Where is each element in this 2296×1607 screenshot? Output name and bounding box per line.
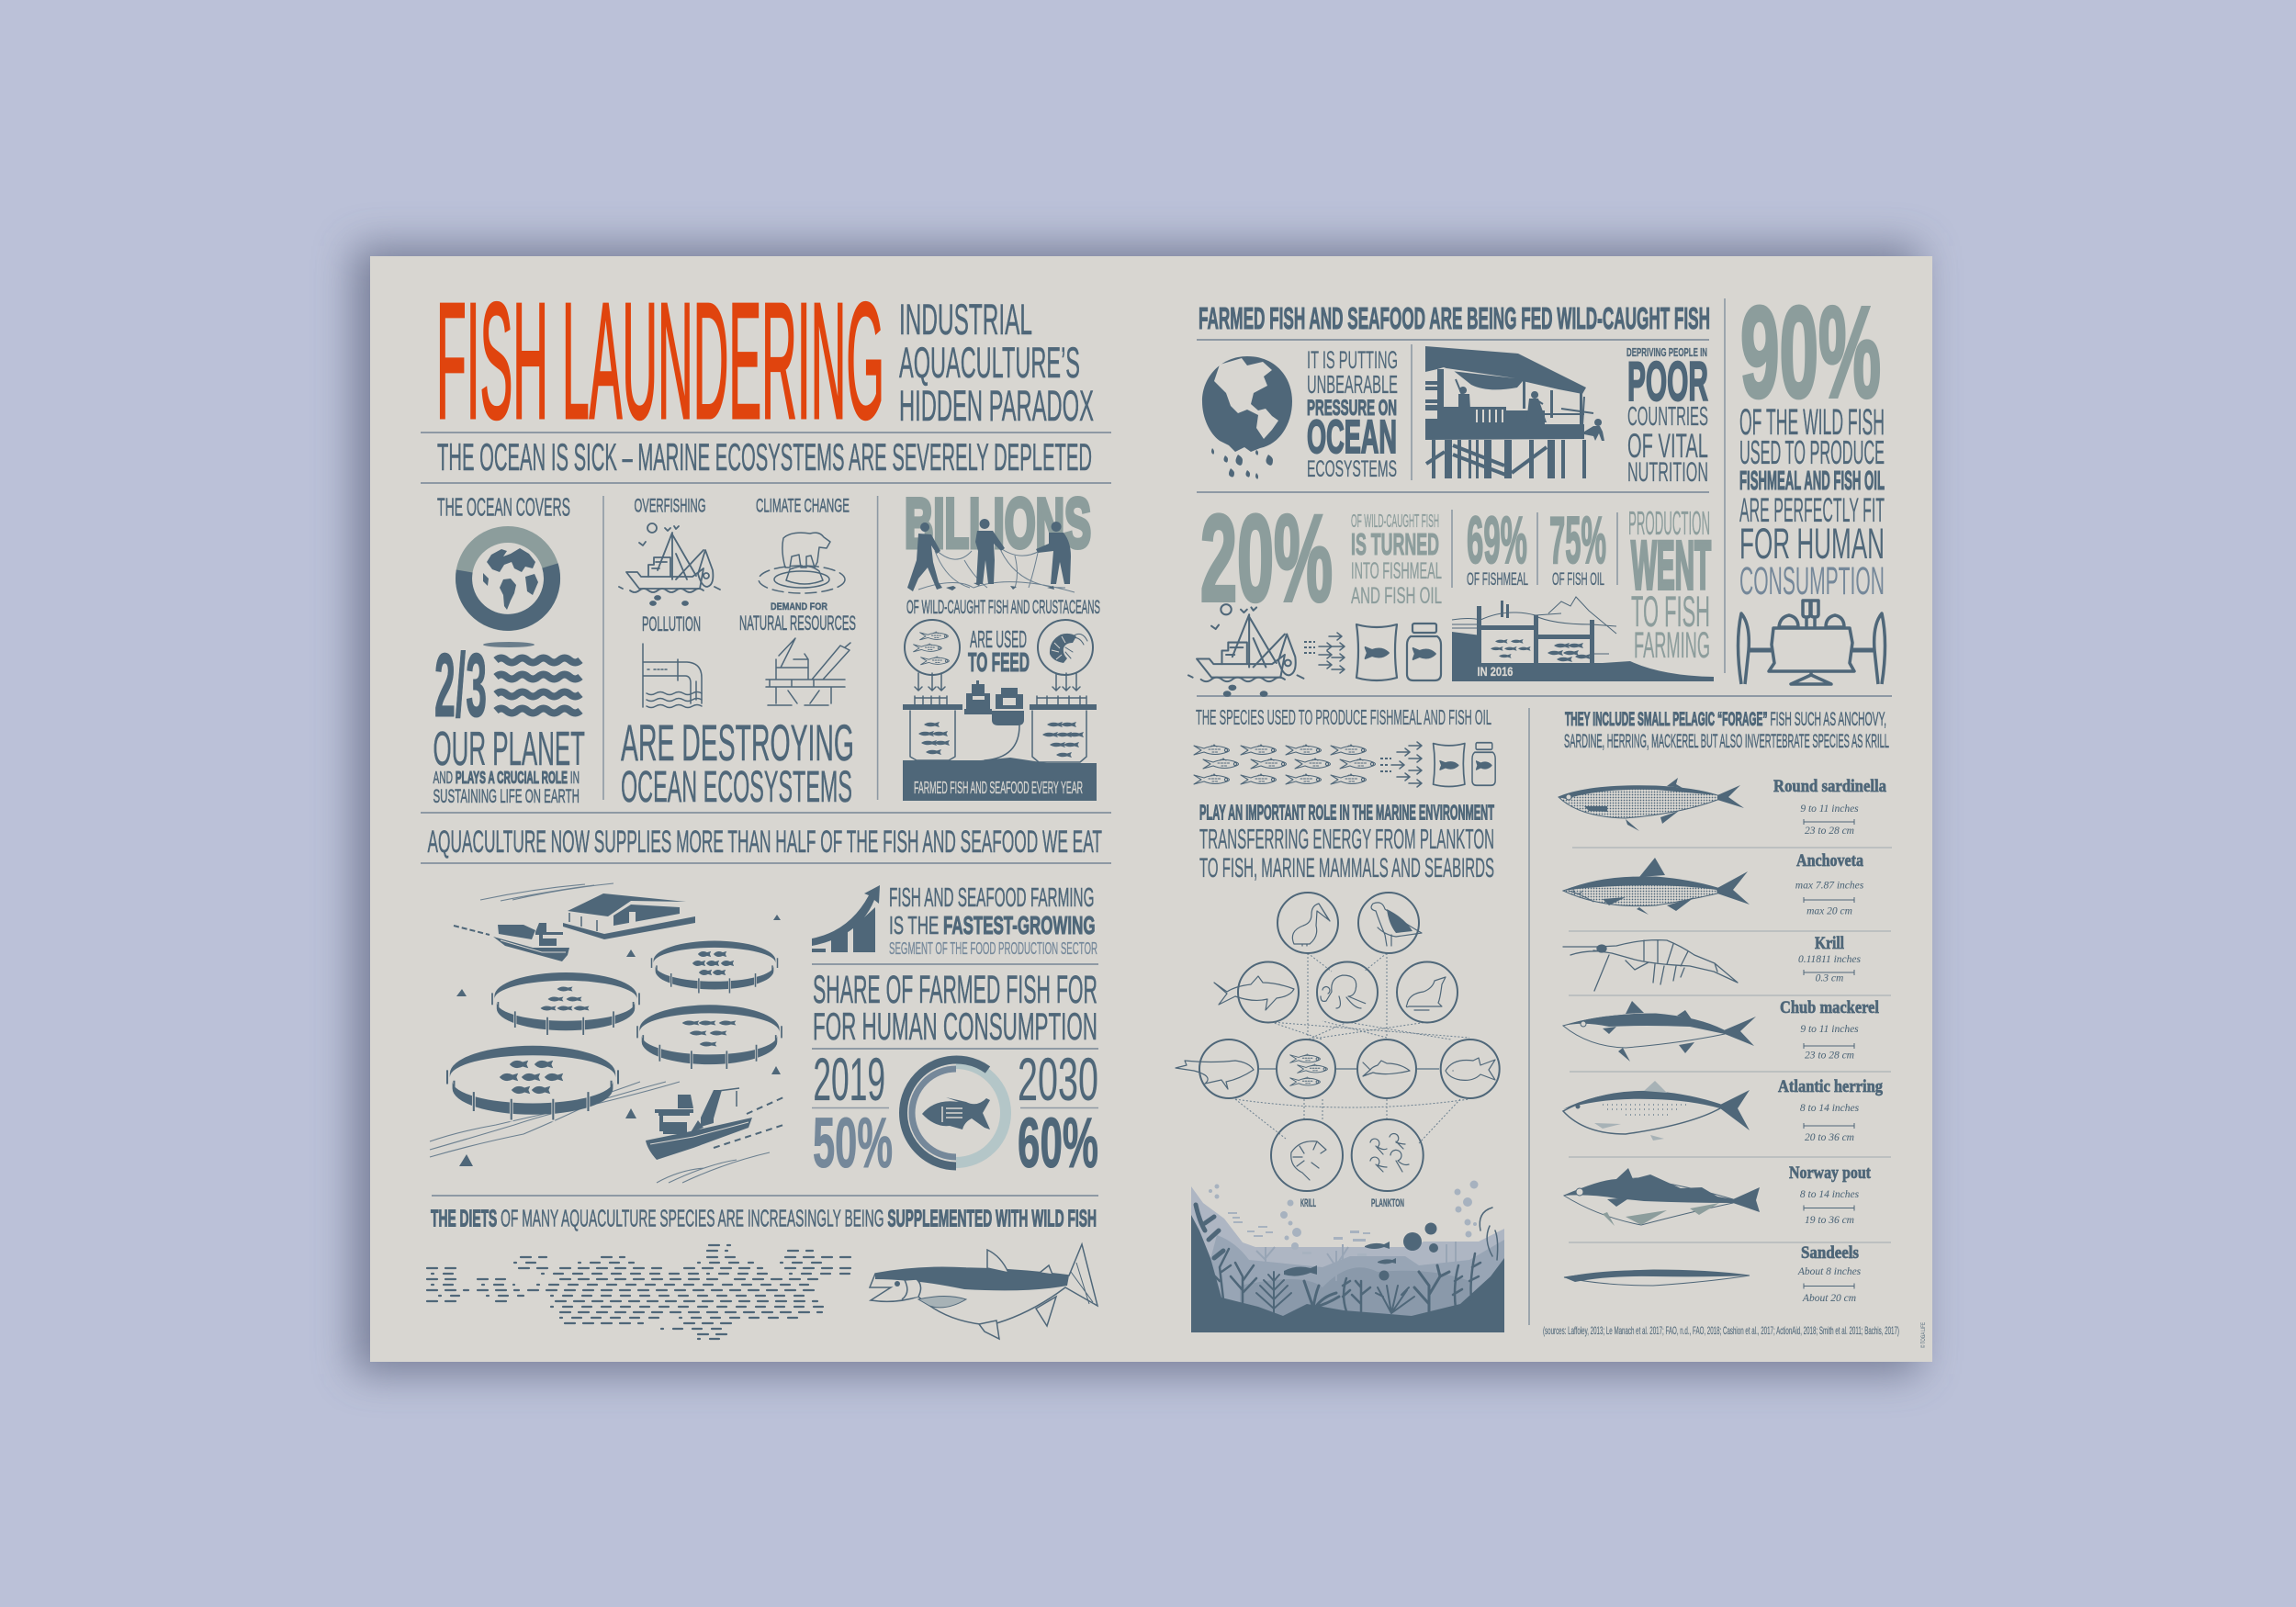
chart: share donut: [904, 1060, 1006, 1166]
stat: 2019: 2019: [813, 1045, 885, 1113]
subtitle: INDUSTRIAL: [899, 295, 1032, 343]
icon: fish trio: [1290, 1054, 1327, 1085]
stat: billions: BILLIONS: [905, 485, 1091, 563]
label: norway pout: [1789, 1163, 1872, 1226]
panel: ocean pressure: [1202, 345, 1708, 488]
text: production went to fish farming: [1628, 504, 1711, 666]
heading: farmed fish fed wild fish: FARMED FISH AND SEAFOOD ARE BEING FED WILD-CAUGHT FISH: [1199, 301, 1710, 335]
label: round sardinella: 23 to 28 cm: [1805, 826, 1854, 837]
text: POOR: [1627, 351, 1708, 412]
stat: 90%: 90%: [1740, 279, 1881, 424]
panel: species and food web: THE SPECIES USED TO PRODUCE FISHMEAL AND FISH OIL: [1196, 705, 1491, 729]
label: krill: 0.11811 inches: [1798, 954, 1861, 965]
title block: [436, 269, 1094, 454]
panel: billions feed: [903, 485, 1100, 801]
text: crucial role: [433, 769, 580, 807]
icon: shrimp circle: [1038, 620, 1093, 675]
globe shadow: [483, 642, 535, 647]
label: sandeels: Sandeels: [1801, 1243, 1859, 1263]
fish: round sardinella: [1559, 778, 1744, 831]
label: atlantic herring: 20 to 36 cm: [1805, 1132, 1854, 1143]
icon: gull: [1371, 903, 1422, 946]
fishing vessel: [646, 1088, 783, 1160]
icon: fish circle: [905, 620, 960, 675]
label: climate change: CLIMATE CHANGE: [756, 496, 850, 517]
illustration: fishermen with net: [907, 519, 1075, 592]
icon: fish oil jar: [1407, 624, 1441, 680]
icon: pelican: [1292, 904, 1330, 946]
text: OF THE WILD FISH: [1739, 402, 1885, 443]
text: are destroying: [621, 714, 854, 812]
label: krill: [1798, 934, 1861, 984]
subtitle: [899, 295, 1094, 430]
poster panel: [370, 256, 1932, 1362]
fish: sandeels: [1564, 1270, 1750, 1286]
text: putting pressure: UNBEARABLE: [1307, 370, 1398, 399]
heading: share of farmed fish: FOR HUMAN CONSUMPTION: [813, 1005, 1097, 1048]
panel: species and food web: [1176, 705, 1504, 1332]
chart: food web: [1176, 893, 1500, 1209]
house: [563, 893, 695, 939]
fish: atlantic herring: [1563, 1081, 1750, 1141]
illustration: fish farm pens: [430, 883, 783, 1183]
text: poor countries: COUNTRIES: [1627, 402, 1708, 432]
label: pollution: POLLUTION: [642, 612, 701, 635]
label: atlantic herring: 8 to 14 inches: [1800, 1103, 1860, 1114]
text: putting pressure: PRESSURE ON: [1307, 396, 1397, 421]
text: perfectly fit: FOR HUMAN: [1739, 519, 1885, 568]
icon: plankton: [1370, 1134, 1409, 1172]
icon: fishing boat: [619, 523, 720, 605]
label: sandeels: [1797, 1243, 1862, 1304]
icon: shark: [1214, 976, 1294, 1010]
bubbles: [1209, 1181, 1479, 1256]
heading: aquaculture supplies: AQUACULTURE NOW SUPPLIES MORE THAN HALF OF THE FISH AND SEAFOOD WE EAT: [428, 825, 1102, 860]
label: anchoveta: max 7.87 inches: [1795, 880, 1864, 891]
reef fish: [1284, 1223, 1438, 1280]
text: poor countries: OF VITAL: [1627, 427, 1708, 465]
panel: 20 percent: OF WILD-CAUGHT FISH: [1351, 511, 1439, 532]
icon: fishmeal bag: [1356, 624, 1397, 680]
illustration: school of small fish: [427, 1245, 859, 1339]
text: fish and seafood farming: FISH AND SEAFOOD FARMING: [889, 883, 1095, 913]
text: crucial role: SUSTAINING LIFE ON EARTH: [433, 786, 580, 807]
text: crucial role: AND PLAYS A CRUCIAL ROLE IN: [433, 769, 580, 787]
text: is turned: [1351, 511, 1442, 609]
icon: sardine rows: [1194, 745, 1376, 784]
wave lines: [430, 883, 770, 1183]
text: SHARE OF FARMED FISH FOR: [813, 968, 1097, 1012]
text: forage fish intro: THEY INCLUDE SMALL PELAGIC “FORAGE” FISH SUCH AS ANCHOVY,: [1565, 709, 1886, 730]
label: sandeels: About 8 inches: [1797, 1266, 1862, 1277]
text: FISH LAUNDERING: [436, 269, 884, 454]
label: chub mackerel: Chub mackerel: [1780, 998, 1879, 1017]
arrows: [1380, 742, 1422, 787]
fish: norway pout: [1564, 1168, 1760, 1226]
icon: oil rig: [766, 638, 850, 705]
icon: pipe: [643, 644, 702, 707]
text: marine role: [1199, 801, 1494, 883]
icon: tuna: [1363, 1061, 1410, 1076]
buoys: [456, 915, 781, 1166]
pen fish: [500, 951, 736, 1094]
stat: 60%: 60%: [1018, 1104, 1098, 1183]
illustration: aquaculture farm: [903, 680, 1097, 801]
panel: billions feed: FARMED FISH AND SEAFOOD EVERY YEAR: [914, 779, 1083, 797]
text: putting pressure: OCEAN: [1307, 410, 1397, 463]
panel: 90 percent: [1738, 279, 1885, 684]
panel: forage fish species: [1559, 709, 1892, 1304]
panel: 20 percent: 75%: [1549, 504, 1606, 578]
text: OF WILD-CAUGHT FISH AND CRUSTACEANS: [906, 597, 1100, 618]
text: perfectly fit: [1739, 402, 1885, 603]
label: round sardinella: [1773, 777, 1886, 837]
chart: food web: KRILL: [1300, 1197, 1316, 1209]
text: FARMING: [1634, 625, 1710, 666]
stat: 20%: 20%: [1200, 490, 1333, 627]
coral and weed foreground: [1196, 1205, 1498, 1318]
icon: jack fish: [1446, 1058, 1495, 1080]
text: copyright: © TOGA LIFE: [1920, 1322, 1927, 1348]
small boat: [493, 923, 569, 961]
arrows: feed down: [915, 673, 1080, 691]
panel: 20 percent: 69%: [1467, 504, 1527, 578]
heading: diets supplemented: THE DIETS OF MANY AQUACULTURE SPECIES ARE INCREASINGLY BEING SUPPLEMENTED WITH WILD FISH: [431, 1205, 1097, 1232]
stat: 75% fish oil: [1549, 504, 1606, 590]
icon: globe ring: [464, 534, 552, 623]
label: round sardinella: 9 to 11 inches: [1800, 804, 1859, 815]
text: putting pressure: [1307, 346, 1398, 482]
text: are used to feed: [968, 625, 1030, 678]
label: norway pout: 19 to 36 cm: [1805, 1215, 1854, 1226]
text: sources: (sources: Laffoley, 2013; Le Manach et al. 2017; FAO, n.d., FAO, 2018; Cashion et al., 2017; ActionAid, 2018; Smith et al. 2011; Bachis, 2017): [1543, 1324, 1899, 1337]
text: forage fish intro: [1564, 709, 1889, 752]
subtitle: AQUACULTURE’S: [899, 338, 1080, 387]
label: krill: 0.3 cm: [1816, 973, 1843, 984]
illustration: stilt house: [1425, 346, 1604, 478]
stat: 75% fish oil: OF FISH OIL: [1552, 570, 1604, 590]
text: ARE PERFECTLY FIT: [1739, 491, 1885, 529]
icon: fishing boat: [1188, 604, 1303, 696]
icon: polar bear: [759, 533, 845, 593]
text: OCEAN ECOSYSTEMS: [621, 763, 852, 812]
fish: chub mackerel: [1563, 1001, 1756, 1062]
panel: 20 percent: [1188, 490, 1714, 696]
text: are used to feed: TO FEED: [968, 648, 1030, 678]
coral background: [1256, 1242, 1456, 1281]
text: CONSUMPTION: [1739, 559, 1885, 603]
arrows: [1304, 633, 1345, 673]
illustration: salmon: [870, 1244, 1097, 1339]
text: fish and seafood farming: IS THE FASTEST-GROWING: [889, 911, 1095, 939]
label: anchoveta: [1795, 851, 1864, 916]
text: putting pressure: IT IS PUTTING: [1307, 346, 1398, 374]
text: PRODUCTION: [1628, 504, 1710, 542]
text: marine role: TO FISH, MARINE MAMMALS AND SEABIRDS: [1199, 853, 1494, 883]
label: atlantic herring: Atlantic herring: [1778, 1077, 1883, 1096]
stat: 69% fishmeal: OF FISHMEAL: [1467, 570, 1528, 590]
fish: anchoveta: [1563, 858, 1750, 915]
stat: 69% fishmeal: [1467, 504, 1528, 590]
icon: dripping globe: [1202, 356, 1292, 479]
text: TO FISH: [1631, 587, 1710, 635]
icon: krill: [1291, 1141, 1326, 1180]
label: krill: Krill: [1815, 934, 1844, 953]
text: putting pressure: ECOSYSTEMS: [1307, 456, 1397, 482]
label: in 2016: IN 2016: [1477, 664, 1514, 679]
icon: small bag: [1434, 744, 1465, 787]
label: sandeels: About 20 cm: [1802, 1293, 1856, 1304]
icon: small jar: [1472, 743, 1495, 785]
text: is turned: IS TURNED: [1351, 527, 1439, 561]
heading: share of farmed fish: [813, 968, 1097, 1048]
panel: fastest growing: [812, 883, 1098, 1183]
label: demand for natural resources: NATURAL RESOURCES: [739, 612, 856, 635]
panel: species and food web: TRANSFERRING ENERGY FROM PLANKTON: [1199, 823, 1494, 855]
label: demand for natural resources: [739, 601, 856, 635]
icon: octopus: [1321, 975, 1366, 1008]
icon: waves: [496, 657, 580, 713]
label: anchoveta: Anchoveta: [1796, 851, 1863, 871]
label: plankton: PLANKTON: [1371, 1197, 1404, 1209]
text: fish and seafood farming: SEGMENT OF THE FOOD PRODUCTION SECTOR: [889, 939, 1097, 958]
fish: krill: [1563, 940, 1738, 991]
label: round sardinella: Round sardinella: [1773, 777, 1886, 796]
icon: seal: [1406, 977, 1446, 1010]
panel: threats: [619, 496, 856, 812]
text: SARDINE, HERRING, MACKEREL BUT ALSO INVERTEBRATE SPECIES AS KRILL: [1564, 731, 1889, 752]
text: PLAY AN IMPORTANT ROLE IN THE MARINE ENVIRONMENT: [1199, 801, 1494, 825]
text: USED TO PRODUCE: [1739, 433, 1885, 471]
text: OUR PLANET: [433, 723, 585, 776]
panel: ocean covers: [433, 492, 585, 807]
text: the ocean covers: THE OCEAN COVERS: [437, 492, 570, 522]
stat: 2030: 2030: [1018, 1045, 1098, 1113]
label: norway pout: 8 to 14 inches: [1800, 1189, 1860, 1200]
label: anchoveta: max 20 cm: [1806, 905, 1852, 916]
icon: growth arrow: [812, 885, 880, 952]
poster shadow: [354, 246, 1919, 1374]
subtitle: HIDDEN PARADOX: [899, 381, 1094, 430]
text: poor countries: [1626, 345, 1708, 488]
illustration: pond farm: [1452, 597, 1714, 681]
panel: billions feed: ARE USED: [970, 625, 1027, 653]
text: is turned: INTO FISHMEAL: [1351, 558, 1442, 584]
label: overfishing: OVERFISHING: [634, 496, 705, 517]
label: atlantic herring: [1778, 1077, 1883, 1143]
text: THE OCEAN IS SICK – MARINE ECOSYSTEMS ARE SEVERELY DEPLETED: [437, 435, 1092, 478]
pens: [652, 941, 777, 995]
icon: dining table: [1738, 601, 1885, 684]
label: chub mackerel: 23 to 28 cm: [1805, 1051, 1854, 1062]
label: chub mackerel: 9 to 11 inches: [1800, 1024, 1859, 1035]
label: chub mackerel: [1780, 998, 1879, 1062]
label: demand for natural resources: DEMAND FOR: [771, 601, 827, 612]
text: fish and seafood farming: [889, 883, 1097, 958]
stat: 50%: 50%: [813, 1104, 893, 1183]
text: FISHMEAL AND FISH OIL: [1739, 466, 1885, 496]
text: poor countries: DEPRIVING PEOPLE IN: [1626, 345, 1707, 359]
illustration: reef: [1191, 1181, 1504, 1332]
text: is turned: AND FISH OIL: [1351, 583, 1442, 609]
text: WENT: [1631, 527, 1711, 603]
icon: whale: [1176, 1061, 1254, 1089]
panel: ocean covers: 2/3: [434, 635, 487, 736]
text: poor countries: NUTRITION: [1627, 457, 1708, 488]
label: norway pout: Norway pout: [1789, 1163, 1872, 1183]
text: are destroying: ARE DESTROYING: [621, 714, 854, 771]
